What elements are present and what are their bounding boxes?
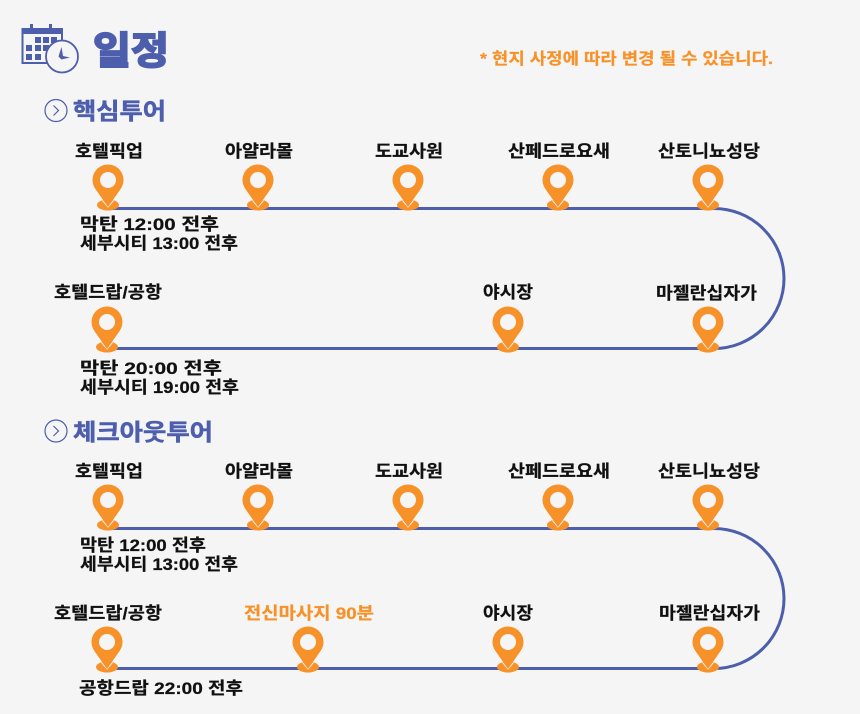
- times 2: [79, 536, 243, 698]
- times 2: 세부시티 13:00 전후: [80, 555, 238, 574]
- labels 1: 야시장: [483, 283, 533, 302]
- labels 1: 산페드로요새: [508, 142, 610, 161]
- times 1: 막탄 20:00 전후: [80, 359, 222, 378]
- labels 1: 호텔드랍/공항: [54, 283, 162, 302]
- route line 1: [108, 208, 784, 348]
- times 1: 세부시티 19:00 전후: [80, 378, 239, 397]
- labels 1: 호텔픽업: [75, 142, 143, 161]
- labels 2: 호텔픽업: [75, 462, 143, 481]
- icon: section arrow 1: [45, 100, 67, 122]
- times 1: 막탄 12:00 전후: [80, 215, 219, 234]
- times 1: 세부시티 13:00 전후: [80, 234, 238, 253]
- pins 1: [92, 165, 724, 352]
- heading: checkout tour: 체크아웃투어: [73, 419, 213, 445]
- labels 2: 도교사원: [375, 462, 443, 481]
- icon: calendar and clock: [22, 24, 78, 72]
- labels 2: 호텔드랍/공항: [54, 604, 162, 623]
- labels 1: 도교사원: [375, 142, 443, 161]
- labels 2: 마젤란십자가: [659, 604, 760, 623]
- labels 1: 아얄라몰: [225, 142, 293, 161]
- note: * 현지 사정에 따라 변경 될 수 있습니다.: [480, 50, 773, 68]
- labels 2: 산페드로요새: [508, 462, 610, 481]
- times 1: [80, 215, 239, 397]
- pins 2: [92, 485, 724, 672]
- times 2: 공항드랍 22:00 전후: [79, 679, 243, 698]
- icon: section arrow 2: [45, 420, 67, 442]
- labels 1: [54, 142, 760, 303]
- heading: core tour: 핵심투어: [73, 98, 166, 124]
- title: 일정: [93, 31, 169, 73]
- labels 2: 전신마사지 90분: [244, 604, 374, 623]
- route line 2: [108, 528, 784, 668]
- labels 1: 산토니뇨성당: [658, 142, 760, 161]
- times 2: 막탄 12:00 전후: [80, 536, 206, 555]
- labels 2: 아얄라몰: [225, 462, 293, 481]
- labels 2: [54, 462, 760, 623]
- labels 2: 야시장: [483, 604, 533, 623]
- labels 2: 산토니뇨성당: [658, 462, 760, 481]
- labels 1: 마젤란십자가: [656, 284, 757, 303]
